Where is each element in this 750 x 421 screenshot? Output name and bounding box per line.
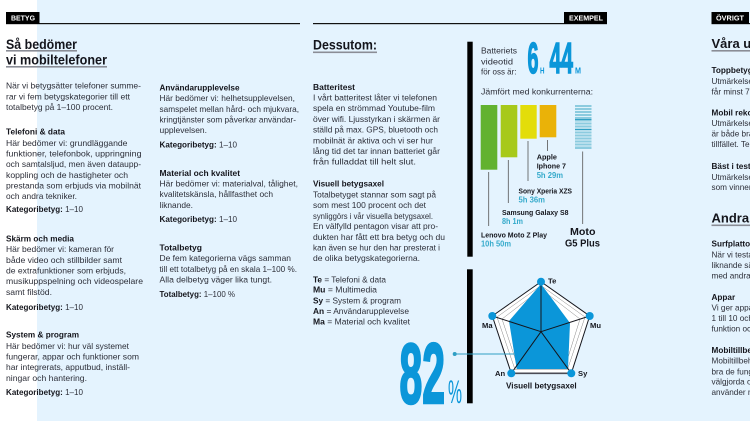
battery headline: 6h 44m: 6 — [528, 34, 538, 83]
text: Telefoni och data: och andra tekniker. — [6, 191, 77, 201]
text: intro: totalbetyg på 1–100 procent. — [6, 102, 113, 112]
text: Användarupplevelse: Här bedömer vi: helhetsupplevelsen, — [160, 93, 295, 103]
text: Batteritest: I vårt batteritest låter vi telefonen — [313, 93, 437, 103]
section bar: exempel — [313, 12, 607, 24]
bar: Moto G5 Plus striped — [575, 105, 592, 149]
text: Batteritest: Batteritest — [313, 82, 355, 92]
bar chart: battery comparison: 5h 36m — [518, 196, 545, 205]
text: System och program: har integrerats, apputbud, inställ- — [6, 362, 130, 372]
text: intro: rar vi fem betygskategorier till ett — [6, 92, 131, 102]
text: Telefoni och data: Kategoribetyg: 1–10 — [6, 204, 83, 214]
battery headline: 6h 44m: H — [540, 66, 545, 76]
text: Batteritest: mobilnät är aktiva och vi ser hur — [313, 136, 433, 146]
battery headline: 6h 44m: 44 — [550, 34, 573, 83]
text: Telefoni och data: funktioner, telefonbok, uppringning — [6, 148, 142, 158]
text: Visuell betygsaxel: synliggörs i vår visuella betygsaxel. — [313, 211, 433, 221]
bar chart: battery comparison: G5 Plus — [565, 238, 600, 250]
legend: category abbreviations: Ma = Material och kvalitet — [313, 316, 411, 326]
text: Skärm och media — [6, 234, 143, 312]
heading: Så bedömer vi mobiltelefoner: vi mobiltelefoner — [6, 52, 107, 68]
radar chart: visuell betygsaxel: Te — [548, 276, 556, 286]
text: Bäst i test — [712, 162, 750, 192]
legend: category abbreviations: An = Användarupplevelse — [313, 306, 409, 316]
text: Batteritest: spela en strömmad Youtube-film — [313, 103, 435, 113]
text: Bäst i test: Bäst i test — [712, 162, 750, 171]
text: Skärm och media: musikuppspelning och videospelare — [6, 276, 143, 286]
text: Skärm och media: de extrafunktioner som erbjuds, — [6, 266, 126, 276]
text: Skärm och media: Här bedömer vi: kameran för — [6, 244, 114, 254]
text: Totalbetyg: Totalbetyg — [160, 242, 202, 252]
text: intro: När vi betygsätter telefoner summe- — [6, 81, 141, 91]
bar chart: battery comparison: Apple — [537, 153, 557, 162]
text: Batteritest: ställd på max. GPS, bluetooth och — [313, 124, 438, 134]
text: Användarupplevelse: Användarupplevelse — [160, 83, 240, 93]
connector: score to radar — [453, 352, 515, 356]
text: System och program: System & program — [6, 330, 79, 340]
text: Visuell betygsaxel: som mest 100 procent och det — [313, 200, 427, 210]
text: Appar — [712, 293, 750, 334]
text: Mobil rekommendation — [712, 108, 750, 149]
text: Visuell betygsaxel: Visuell betygsaxel — [313, 179, 384, 189]
section bar: exempel: EXEMPEL — [569, 16, 604, 22]
text: Material och kvalitet — [160, 168, 298, 224]
heading: Dessutom: Dessutom: — [313, 36, 377, 52]
text: Visuell betygsaxel: kan även se hur den har presterat i — [313, 242, 440, 252]
text: Totalbetyg: Alla delbetyg väger lika tungt. — [160, 274, 272, 284]
text: Appar: Appar — [712, 293, 736, 302]
bar chart: battery comparison: Lenovo Moto Z Play — [481, 230, 548, 239]
radar chart: visuell betygsaxel: Sy — [578, 369, 588, 378]
text: Totalbetyg: till ett totalbetyg på en skala 1–100 %. — [160, 264, 297, 274]
bar chart: battery comparison: 8h 1m — [502, 217, 523, 226]
text: Batteritest: över wifi. Ljusstyrkan i skärmen är — [313, 114, 440, 124]
text: Skärm och media: Skärm och media — [6, 234, 74, 244]
text: Material och kvalitet: Här bedömer vi: materialval, tålighet, — [160, 178, 298, 188]
text: comparison heading: Jämfört med konkurrenterna: — [481, 87, 593, 97]
text: System och program: Kategoribetyg: 1–10 — [6, 387, 83, 397]
text: Användarupplevelse: Kategoribetyg: 1–10 — [160, 140, 237, 150]
section bar: betyg — [6, 12, 300, 24]
battery headline: 6h 44m: Batteriets — [481, 45, 517, 55]
bar chart: battery comparison: Moto — [570, 226, 596, 238]
score: 82 percent: 82 — [400, 327, 445, 421]
text: Visuell betygsaxel: En välfylld pentagon visar att pro- — [313, 221, 438, 231]
text: Telefoni och data: Telefoni & data — [6, 126, 65, 136]
text: Material och kvalitet: kvalitetskänsla, hållfasthet och — [160, 189, 273, 199]
section bar: övrigt — [712, 12, 750, 24]
text: Användarupplevelse: kringtjänster som påverkar användar- — [160, 114, 296, 124]
radar chart: visuell betygsaxel: Mu — [590, 321, 601, 330]
text: Batteritest: från fulladdat till helt slut. — [313, 156, 416, 166]
bar chart: battery comparison: Iphone 7 — [537, 162, 566, 171]
text: intro — [6, 81, 141, 112]
legend: category abbreviations — [313, 274, 411, 326]
text: Skärm och media: samt filstöd. — [6, 287, 52, 297]
text: Användarupplevelse — [160, 83, 299, 150]
text: Material och kvalitet: liknande. — [160, 200, 193, 210]
text: System och program: fungerar, appar och funktioner som — [6, 352, 139, 362]
text: Skärm och media: både video och stillbilder samt — [6, 255, 123, 265]
text: System och program: ningar och hantering. — [6, 373, 87, 383]
section bar: betyg: BETYG — [11, 16, 36, 22]
text: Toppbetyg: får minst 7 — [712, 86, 750, 96]
legend: category abbreviations: Te = Telefoni & data — [313, 274, 386, 284]
text: Skärm och media: Kategoribetyg: 1–10 — [6, 302, 83, 312]
text: Visuell betygsaxel: de olika betygskategorierna. — [313, 253, 420, 263]
bar chart: battery comparison: 10h 50m — [481, 240, 511, 249]
text: Batteritest: lång tid det tar innan batteriet går — [313, 146, 440, 156]
text: Batteritest — [313, 82, 440, 166]
text: Visuell betygsaxel: Totalbetyget stannar som sagt på — [313, 190, 436, 200]
section bar: övrigt: ÖVRIGT — [716, 14, 745, 22]
radar chart: visuell betygsaxel: Visuell betygsaxel — [506, 381, 577, 391]
text: Visuell betygsaxel — [313, 179, 445, 263]
text: System och program — [6, 330, 139, 397]
battery headline: 6h 44m: videotid — [481, 56, 513, 66]
text: Visuell betygsaxel: dukten har fått ett bra betyg och du — [313, 232, 445, 242]
text: Totalbetyg: Totalbetyg: 1–100 % — [160, 289, 235, 299]
text: Telefoni och data — [6, 126, 142, 214]
bar chart: battery comparison: 5h 29m — [537, 171, 563, 180]
text: Totalbetyg — [160, 242, 297, 299]
infographic page: % — [448, 374, 462, 410]
heading: Så bedömer vi mobiltelefoner: Så bedömer — [6, 36, 77, 52]
text: Mobiltillbehör — [712, 346, 750, 397]
text: Telefoni och data: och samtalsljud, men även dataupp- — [6, 159, 141, 169]
text: System och program: Här bedömer vi: hur väl systemet — [6, 341, 130, 351]
divider bar — [467, 269, 473, 403]
text: Användarupplevelse: samspelet mellan hård- och mjukvara, — [160, 104, 299, 114]
text: Mobil rekommendation: tillfället. Te — [712, 140, 750, 149]
text: Telefoni och data: koppling och de hastigheter och — [6, 170, 128, 180]
battery headline: 6h 44m: för oss är: — [481, 66, 516, 76]
text: Material och kvalitet: Material och kvalitet — [160, 168, 240, 178]
radar chart: visuell betygsaxel: Ma — [482, 321, 493, 330]
battery headline: 6h 44m — [467, 34, 581, 257]
legend: category abbreviations: Mu = Multimedia — [313, 285, 377, 295]
radar chart: visuell betygsaxel: An — [495, 369, 505, 378]
score: 82 percent — [400, 327, 462, 421]
text: Surfplattor — [712, 240, 750, 280]
text: Totalbetyg: De fem kategorierna vägs samman — [160, 253, 291, 263]
text: Telefoni och data: Här bedömer vi: grundläggande — [6, 138, 128, 148]
radar chart: visuell betygsaxel — [482, 276, 601, 391]
text: Användarupplevelse: upplevelsen. — [160, 125, 207, 135]
text: Material och kvalitet: Kategoribetyg: 1–10 — [160, 214, 237, 224]
bar chart: battery comparison: Samsung Galaxy S8 — [502, 208, 568, 217]
text: Surfplattor: med andra — [712, 272, 750, 280]
heading: Så bedömer vi mobiltelefoner — [6, 36, 107, 68]
battery headline: 6h 44m: M — [575, 66, 581, 76]
text: Toppbetyg — [712, 66, 750, 96]
text: Telefoni och data: prestanda som erbjuds via mobilnät — [6, 180, 142, 190]
legend: category abbreviations: Sy = System & program — [313, 296, 401, 306]
bar chart: battery comparison: Sony Xperia XZS — [518, 186, 572, 195]
bar chart: battery comparison — [481, 105, 600, 250]
